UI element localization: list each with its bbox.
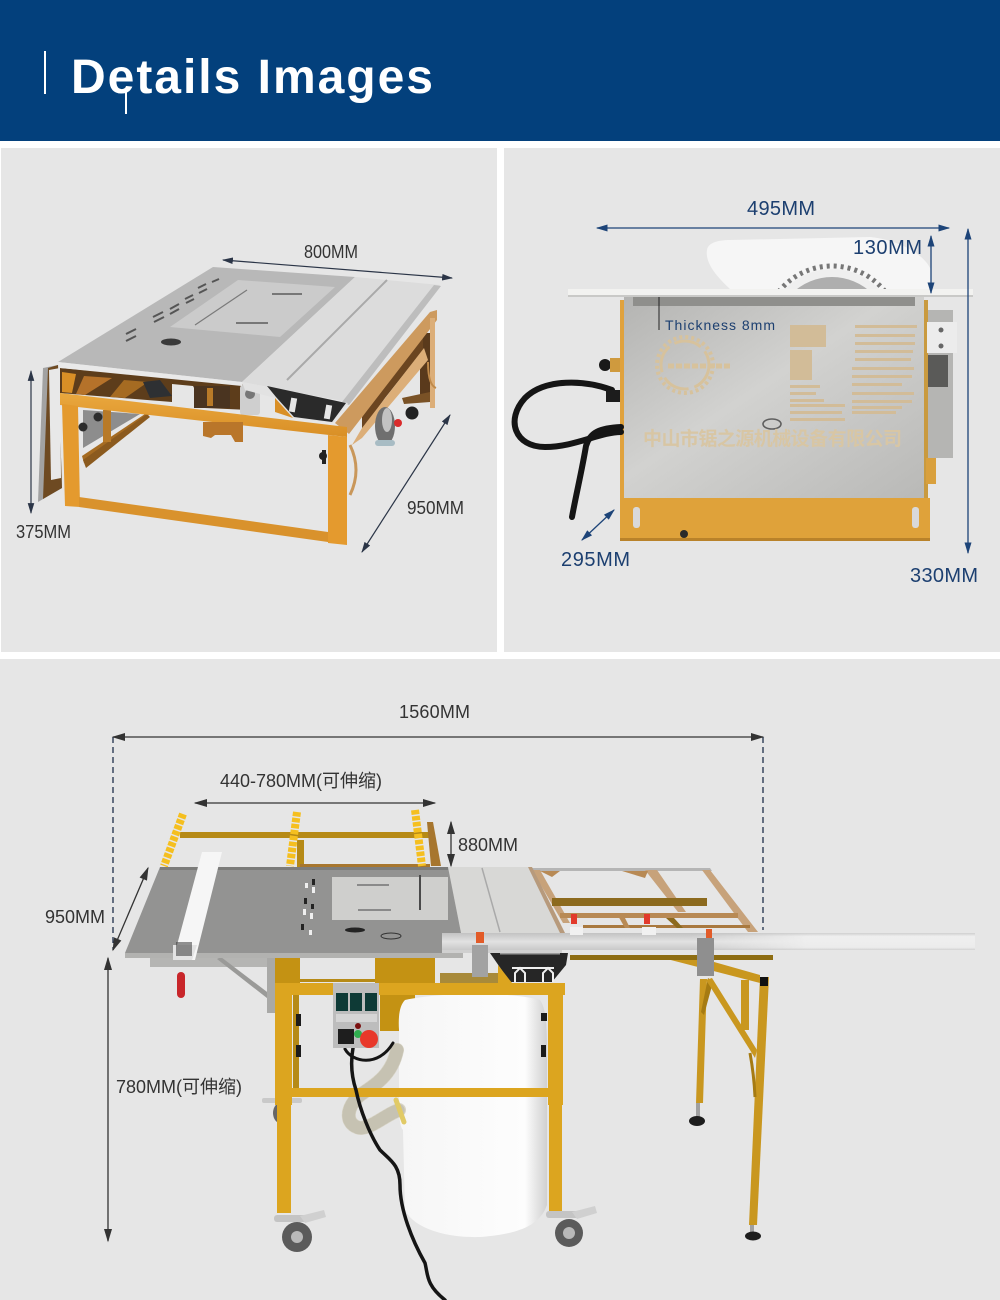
- table frame rear legs: [293, 979, 375, 1089]
- yellow frame: [275, 983, 565, 1213]
- dimension arrows: [108, 737, 763, 1241]
- label: 130MM: 130MM: [853, 237, 922, 259]
- right leg: [328, 435, 347, 545]
- panel: side view dimensions: [504, 148, 1000, 652]
- panel: extended table dimensions: [0, 659, 1000, 1300]
- table slots: [301, 879, 401, 939]
- power cables: [515, 383, 621, 517]
- white fence: [173, 852, 222, 960]
- label: 780MM: 780MM(可伸缩): [116, 1077, 242, 1097]
- power cable: [345, 1043, 445, 1300]
- saw blade: [778, 264, 886, 289]
- label: 880MM: 880MM: [458, 835, 518, 855]
- side panel back: [420, 333, 431, 400]
- extension legs: [570, 955, 773, 1225]
- steel side plate: [624, 297, 924, 498]
- roller strips: [164, 810, 422, 866]
- label: 295MM: 295MM: [561, 549, 630, 571]
- back support rail: [180, 822, 441, 868]
- label: 495MM: 495MM: [747, 198, 815, 220]
- rear caster: [262, 1098, 302, 1124]
- levelling feet: [689, 1103, 761, 1240]
- dark window: [362, 333, 423, 430]
- folded side wing: [38, 365, 62, 502]
- control box: [333, 983, 379, 1048]
- label: 800MM: 800MM: [304, 242, 358, 262]
- table top: [568, 289, 973, 297]
- label: 950MM: 950MM: [407, 498, 464, 518]
- panel: folded table dimensions: [1, 148, 497, 652]
- frame knobs: [296, 1013, 547, 1057]
- label: 440-780MM: 440-780MM(可伸缩): [220, 771, 382, 791]
- insert plate: [332, 877, 448, 920]
- extension frame: [532, 868, 758, 932]
- logo gear: [657, 337, 730, 393]
- label: 950MM: 950MM: [45, 907, 105, 927]
- wheel and knobs: [375, 407, 395, 445]
- orange frame: [60, 310, 437, 545]
- folding saw table top: [125, 867, 565, 958]
- label: 375MM: 375MM: [16, 522, 71, 542]
- red fence handle: [177, 972, 185, 998]
- lower rail: [79, 497, 328, 542]
- front beam: [60, 393, 347, 437]
- fence section: [242, 277, 441, 405]
- header banner: [0, 0, 1000, 141]
- underside mechanism: [60, 368, 260, 415]
- aluminium profile: [490, 953, 568, 983]
- rear frame plate and struts: [82, 410, 150, 468]
- hinge arm: [350, 445, 356, 495]
- dashed extent lines: [113, 737, 763, 950]
- printed specification lines: [790, 325, 917, 421]
- left leg: [62, 404, 80, 507]
- thickness pointer: [658, 297, 660, 330]
- folding wing support: [150, 957, 275, 1013]
- dimension arrows: [31, 260, 452, 552]
- label: 1560MM: 1560MM: [399, 702, 470, 722]
- cable gland and knob: [599, 358, 620, 402]
- clamps: [472, 914, 714, 977]
- orange base and side: [620, 300, 930, 541]
- aluminium profile end: [242, 382, 348, 423]
- ring latch: [763, 419, 781, 429]
- dimension arrows: [582, 228, 968, 553]
- label: Thickness 8mm: Thickness 8mm: [665, 317, 775, 333]
- table top plate: [58, 267, 355, 386]
- sliding rail: [442, 933, 975, 953]
- dust bag: [399, 994, 547, 1237]
- label: 330MM: 330MM: [910, 565, 978, 587]
- under-table motor housing: [275, 958, 500, 1031]
- centre bracket: [203, 422, 243, 442]
- post and hook: [430, 318, 435, 408]
- second band: [352, 348, 428, 445]
- right adjustment plate: [926, 310, 957, 484]
- top band: [335, 310, 437, 434]
- blade guard: [707, 237, 931, 289]
- watermark text: 中山市锯之源机械设备有限公司: [643, 427, 902, 450]
- title: Details Images: [71, 51, 433, 104]
- casters: [274, 1206, 597, 1252]
- dust hose: [349, 1050, 404, 1128]
